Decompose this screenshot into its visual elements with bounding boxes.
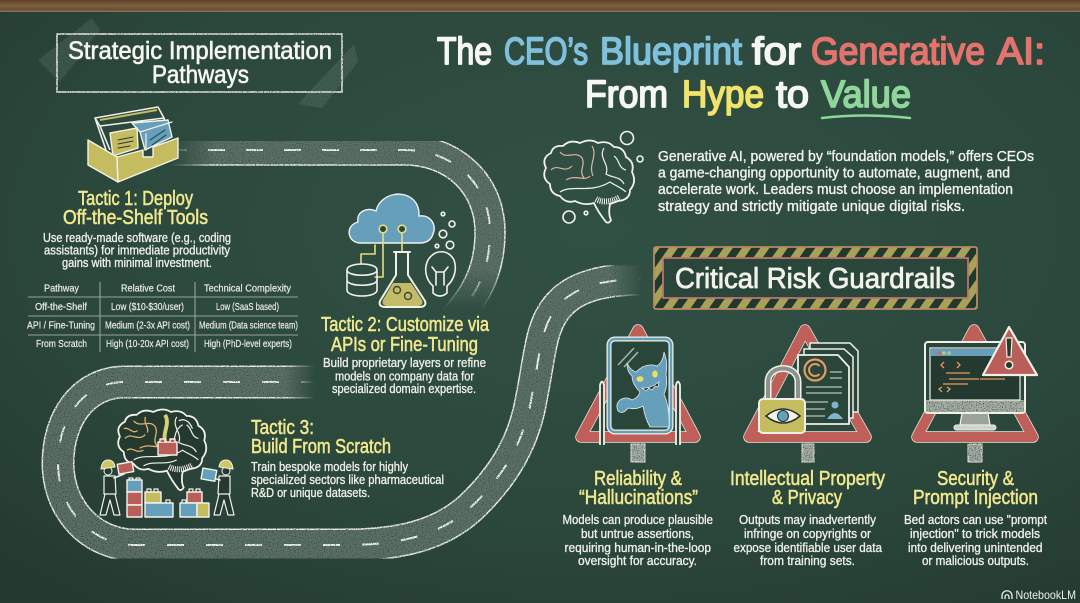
intro paragraph: strategy and strictly mitigate unique digital risks. xyxy=(658,198,965,215)
text block: tactic 1: Use ready-made software (e.g., coding xyxy=(43,230,231,245)
comparison table: High (PhD-level experts) xyxy=(204,338,292,350)
text block: intellectual property: & Privacy xyxy=(772,487,842,509)
text block: tactic 3: R&D or unique datasets. xyxy=(251,485,370,500)
title: CEO’s xyxy=(504,31,588,73)
text block: reliability: requiring human-in-the-loop xyxy=(564,540,711,555)
text block: intellectual property: infringe on copyrights or xyxy=(744,526,872,541)
text block: tactic 1: Tactic 1: Deploy xyxy=(78,188,193,210)
text block: tactic 3: Train bespoke models for highly xyxy=(251,459,408,474)
intro paragraph: a game-changing opportunity to automate, augment, and xyxy=(658,164,1010,182)
icon: brain with builders and blocks xyxy=(100,410,234,517)
text block: tactic 3 xyxy=(251,417,444,500)
text block: intellectual property xyxy=(730,468,885,568)
text block: security xyxy=(904,468,1047,568)
comparison table: High (10-20x API cost) xyxy=(106,338,189,350)
title: Value xyxy=(821,74,911,116)
title: for xyxy=(752,31,801,73)
icon: intro brain xyxy=(544,132,643,223)
text block: tactic 1: assistants) for immediate productivity xyxy=(44,242,230,258)
title: Generative xyxy=(811,31,985,73)
comparison table xyxy=(27,282,298,352)
heading: strategic implementation pathways: Strategic Implementation xyxy=(68,37,332,65)
comparison table: Off-the-Shelf xyxy=(35,301,87,313)
comparison table: Low (SaaS based) xyxy=(216,301,279,313)
road: exit to the right xyxy=(965,262,1080,294)
comparison table: Low ($10-$30/user) xyxy=(111,301,184,313)
text block: tactic 1: gains with minimal investment. xyxy=(62,255,212,270)
text block: tactic 3: Build From Scratch xyxy=(251,436,391,458)
comparison table: Pathway xyxy=(44,282,80,294)
title: AI: xyxy=(997,31,1045,73)
heading: strategic implementation pathways: Pathways xyxy=(152,61,249,89)
icon: toolbox xyxy=(88,107,178,182)
text block: intellectual property: expose identifiable user data xyxy=(734,540,883,555)
title: From xyxy=(585,74,668,116)
intro paragraph: accelerate work. Leaders must choose an implementation xyxy=(658,181,1013,198)
panel: security and prompt injection xyxy=(904,327,1047,568)
comparison table: API / Fine-Tuning xyxy=(27,320,95,332)
text block: intellectual property: Intellectual Property xyxy=(730,468,885,490)
text block: security: Prompt Injection xyxy=(913,487,1038,509)
comparison table: Relative Cost xyxy=(121,282,175,294)
comparison table: Technical Complexity xyxy=(204,282,292,294)
panel: intellectual property and privacy xyxy=(730,330,885,568)
text block: security: Bed actors can use "prompt xyxy=(904,512,1047,527)
icon: warning triangle with monitor and alert xyxy=(917,327,1037,462)
title xyxy=(437,31,1045,118)
title: Hype xyxy=(682,74,764,116)
intro paragraph: Generative AI, powered by “foundation models,” offers CEOs xyxy=(658,148,1034,165)
text block: reliability: oversight for accuracy. xyxy=(578,553,697,568)
text block: tactic 1 xyxy=(43,188,231,270)
text block: intellectual property: Outputs may inadvertently xyxy=(739,512,876,527)
panel: reliability and hallucinations xyxy=(562,330,713,568)
text block: security: into delivering unintended xyxy=(908,540,1042,555)
panel: strategic implementation pathways xyxy=(27,18,490,517)
text block: reliability: Reliability & xyxy=(594,468,683,490)
title: to xyxy=(776,74,809,116)
wooden frame xyxy=(0,0,1080,12)
icon: warning triangle with monster mirror xyxy=(581,330,695,462)
text block: reliability xyxy=(562,468,713,568)
comparison table: From Scratch xyxy=(36,338,87,350)
text block: reliability: “Hallucinations” xyxy=(579,487,698,509)
text block: security: Security & xyxy=(937,468,1015,490)
text block: reliability: Models can produce plausible xyxy=(562,512,713,527)
text block: tactic 2: Tactic 2: Customize via xyxy=(321,314,490,336)
text block: tactic 2: APIs or Fine-Tuning xyxy=(331,334,478,356)
text block: reliability: but untrue assertions, xyxy=(581,526,694,541)
comparison table: Medium (2-3x API cost) xyxy=(105,320,190,332)
text block: tactic 2: models on company data for xyxy=(335,368,475,384)
text block: tactic 2: Build proprietary layers or refine xyxy=(323,355,486,370)
icon: warning triangle with lock and documents xyxy=(749,330,866,462)
comparison table: Medium (Data science team) xyxy=(199,320,298,332)
text block: security: injection" to trick models xyxy=(910,526,1040,541)
text block: tactic 3: specialized sectors like pharmaceutical xyxy=(251,472,444,487)
intro paragraph xyxy=(658,148,1034,215)
banner: critical risk guardrails: Critical Risk Guardrails xyxy=(675,263,955,295)
icon: cloud, database, flask and bulb xyxy=(347,194,455,307)
road: top section toward tactic 2 xyxy=(170,150,490,322)
text block: tactic 3: Tactic 3: xyxy=(251,417,314,439)
banner: critical risk guardrails xyxy=(654,247,977,309)
text block: security: or malicious outputs. xyxy=(922,553,1029,568)
heading: strategic implementation pathways xyxy=(38,18,358,108)
text block: tactic 2 xyxy=(321,314,490,396)
title: Blueprint xyxy=(600,31,742,73)
title: The xyxy=(437,31,492,73)
text block: tactic 1: Off-the-Shelf Tools xyxy=(63,207,208,229)
road: winding main section to guardrails xyxy=(58,279,645,545)
text block: intellectual property: from training sets. xyxy=(760,553,855,568)
text block: tactic 2: specialized domain expertise. xyxy=(332,381,476,396)
